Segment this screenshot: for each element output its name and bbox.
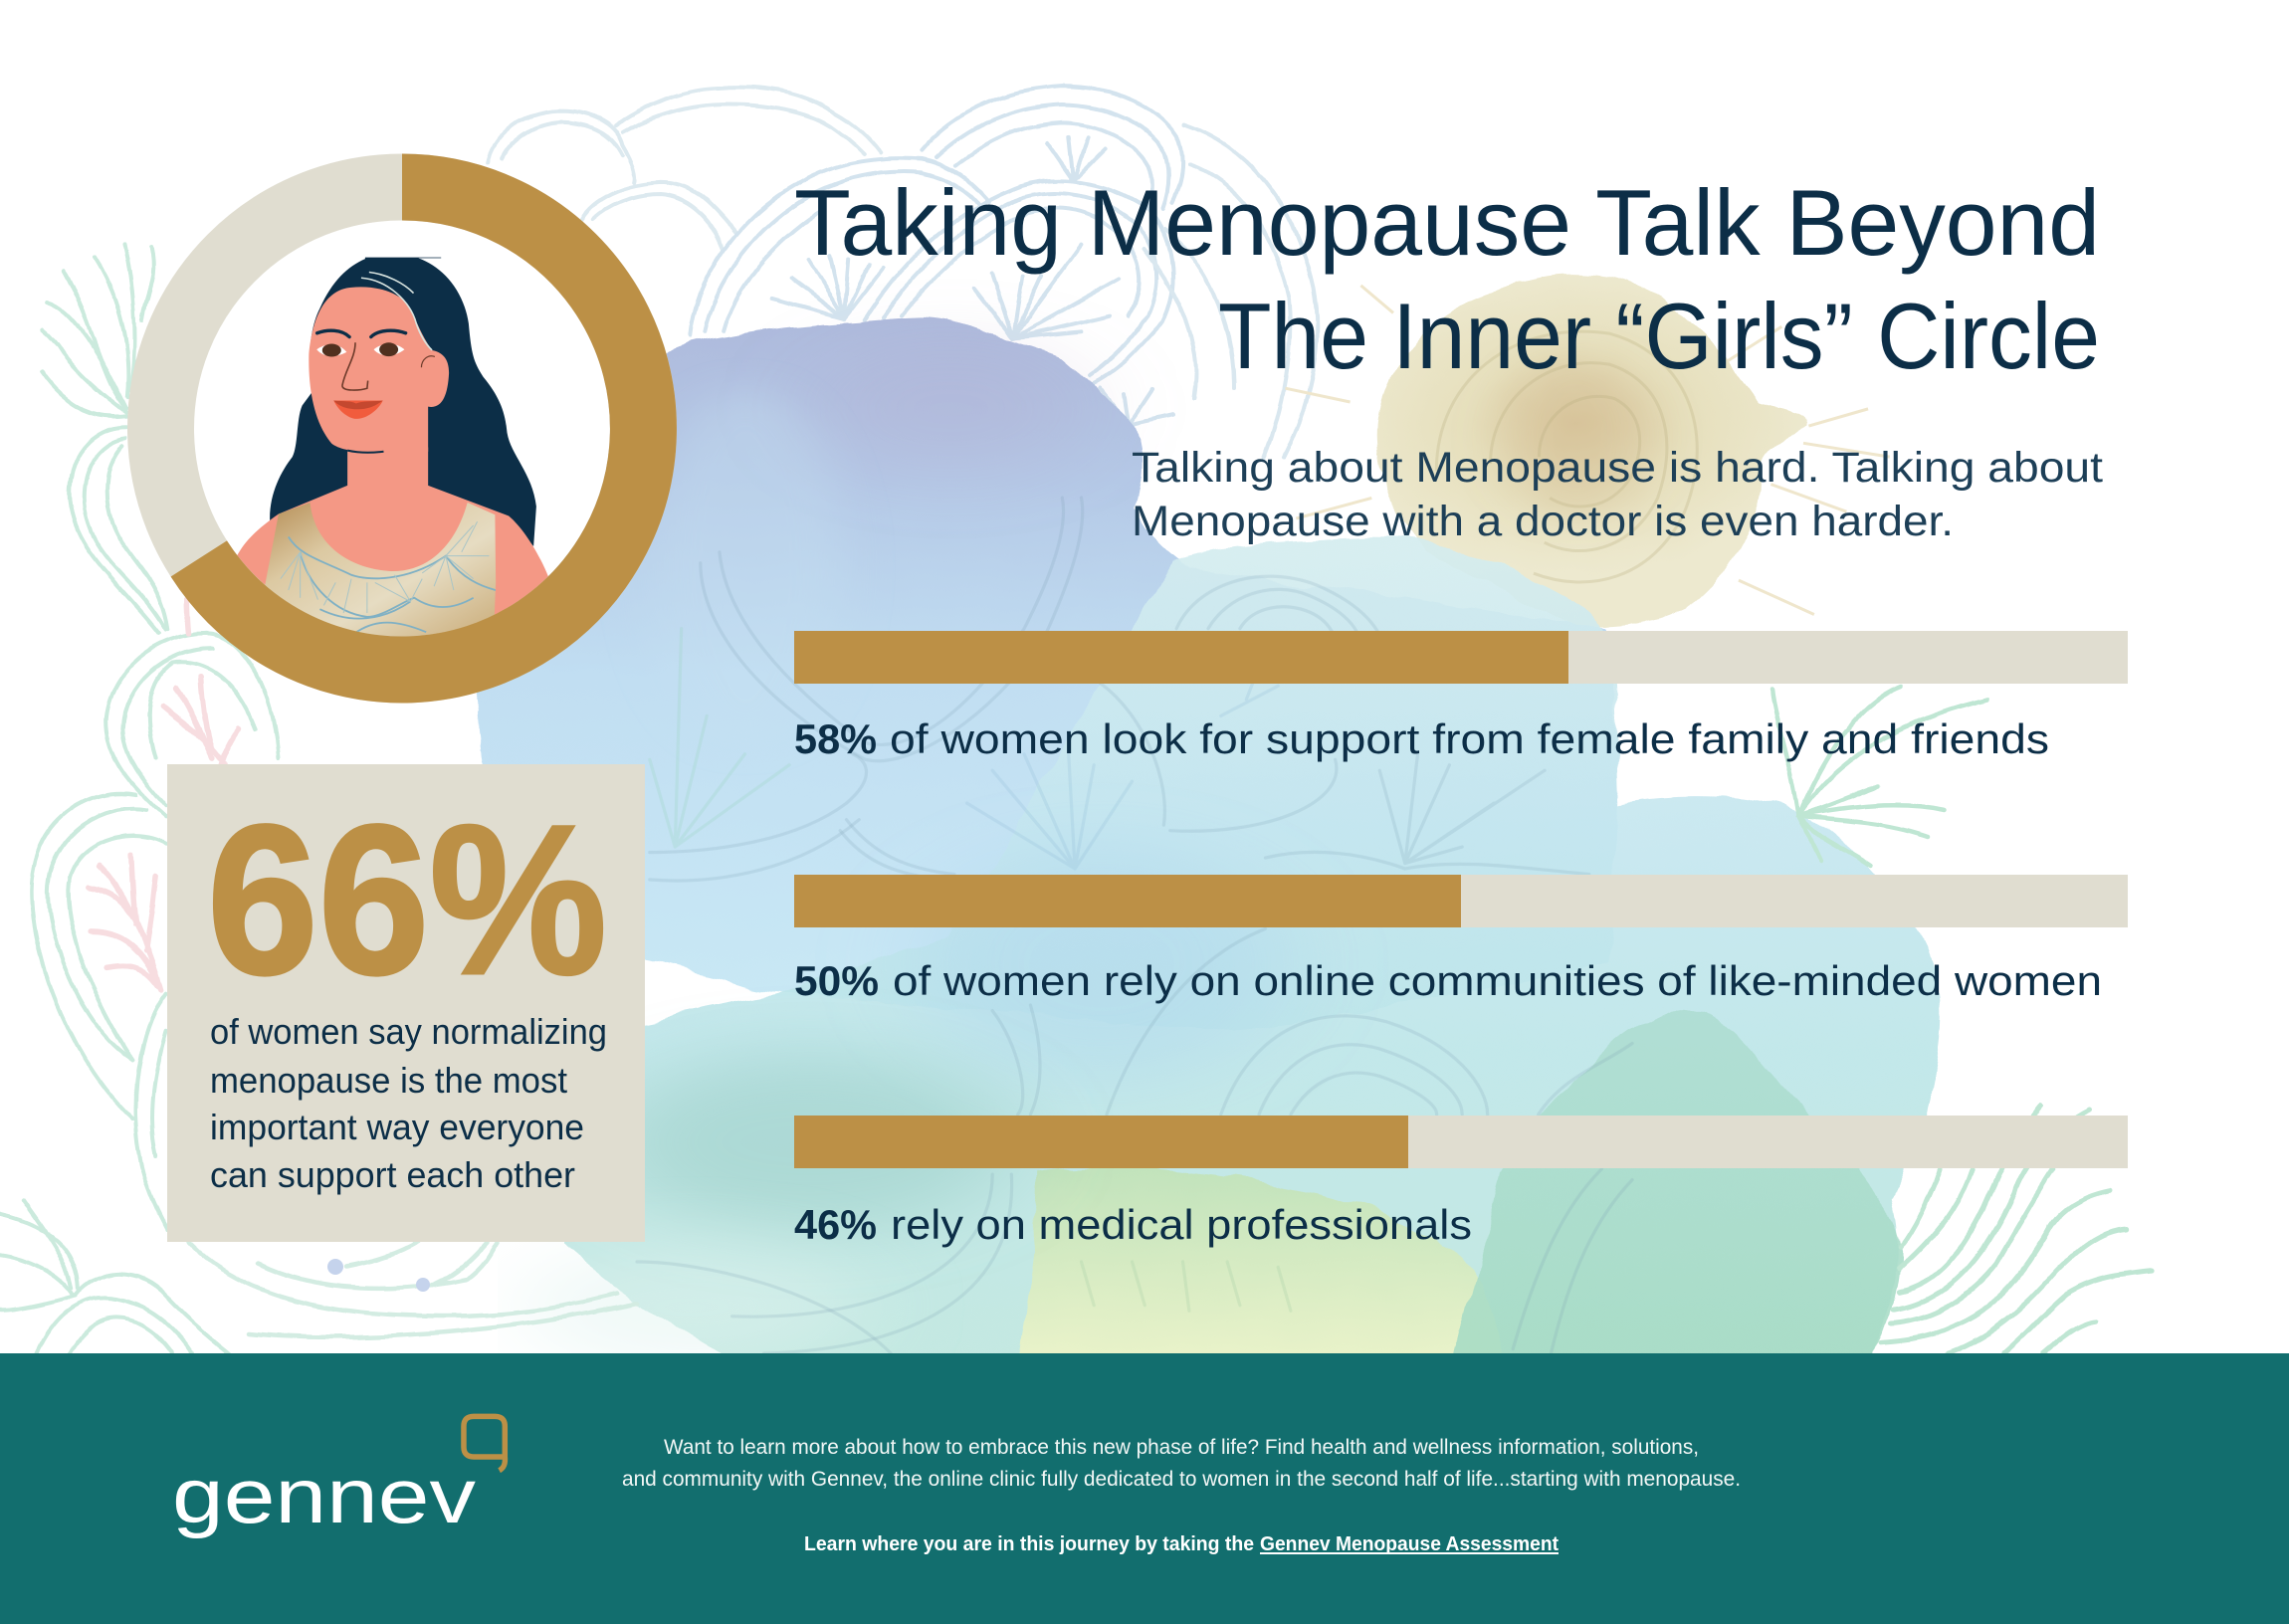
pink coral branches [88, 600, 239, 990]
footer band [0, 1353, 2289, 1624]
bar chart: 46% [794, 1116, 2128, 1248]
eyes [316, 344, 346, 356]
stat description [210, 1011, 607, 1195]
eyebrows [317, 330, 406, 337]
stat description: of women say normalizing [210, 1011, 607, 1052]
icon: speech bubble [464, 1416, 505, 1471]
logo: gennev: gennev [172, 1452, 476, 1539]
bar label: 46% [794, 1201, 877, 1248]
subtitle: Menopause with a doctor is even harder. [1132, 498, 1954, 545]
stat description: menopause is the most [210, 1060, 567, 1101]
bar label: of women look for support from female family and friends [890, 715, 2049, 762]
neck and shoulders [237, 448, 549, 642]
logo: gennev [172, 1416, 505, 1539]
line art: grey-blue shell lines inside the wash [637, 498, 1632, 1353]
call to action: Gennev Menopause Assessment [1260, 1533, 1559, 1555]
hair [270, 258, 536, 546]
line art: blue shells along the top [488, 87, 1318, 458]
call to action: Learn where you are in this journey by taking the [804, 1533, 1254, 1555]
watercolor background [475, 275, 1942, 1368]
bar chart: 50% [794, 875, 2128, 1004]
line art: green waves at the lower right [1881, 1107, 2152, 1353]
face [309, 287, 449, 452]
chin line [347, 451, 383, 453]
illustration: woman portrait [237, 258, 549, 642]
line art: green sea fans and shells on the left [0, 243, 637, 1353]
subtitle [1132, 444, 2103, 545]
stat box: 66% [167, 764, 645, 1242]
donut value arc [199, 187, 643, 670]
icon: blue paint dots [327, 1259, 430, 1292]
bar label: of women rely on online communities of like-minded women [893, 957, 2102, 1004]
lips [333, 400, 383, 419]
soft colour washes [520, 340, 1652, 1368]
line art: rings on the khaki blob [1286, 286, 1890, 615]
title: Taking Menopause Talk Beyond [794, 170, 2100, 275]
subtitle: Talking about Menopause is hard. Talking about [1132, 444, 2103, 492]
stat description: can support each other [210, 1154, 575, 1195]
bar label: 50% [794, 957, 879, 1004]
bar label: 58% [794, 715, 877, 762]
donut track [161, 187, 643, 670]
donut chart: 66% [161, 187, 643, 670]
footer copy: Want to learn more about how to embrace this new phase of life? Find health and wellness information, solutions, [664, 1436, 1699, 1459]
big number: 66% [207, 781, 607, 1019]
call to action [804, 1533, 1559, 1555]
bar label: rely on medical professionals [891, 1201, 1472, 1248]
bar chart: 58% [794, 631, 2128, 762]
title [794, 170, 2100, 388]
footer copy [622, 1436, 1741, 1491]
lines under the stat box [189, 1242, 637, 1337]
patterned top [264, 503, 496, 642]
watercolor blobs [475, 275, 1942, 1358]
stat description: important way everyone [210, 1107, 584, 1147]
nose [342, 342, 368, 390]
hair strands [361, 273, 432, 350]
footer copy: and community with Gennev, the online clinic fully dedicated to women in the second half of life...starting with menopause. [622, 1468, 1741, 1491]
line art: green sea fan on the right [1771, 687, 1987, 866]
title: The Inner “Girls” Circle [1218, 284, 2100, 388]
ear detail [421, 356, 435, 367]
